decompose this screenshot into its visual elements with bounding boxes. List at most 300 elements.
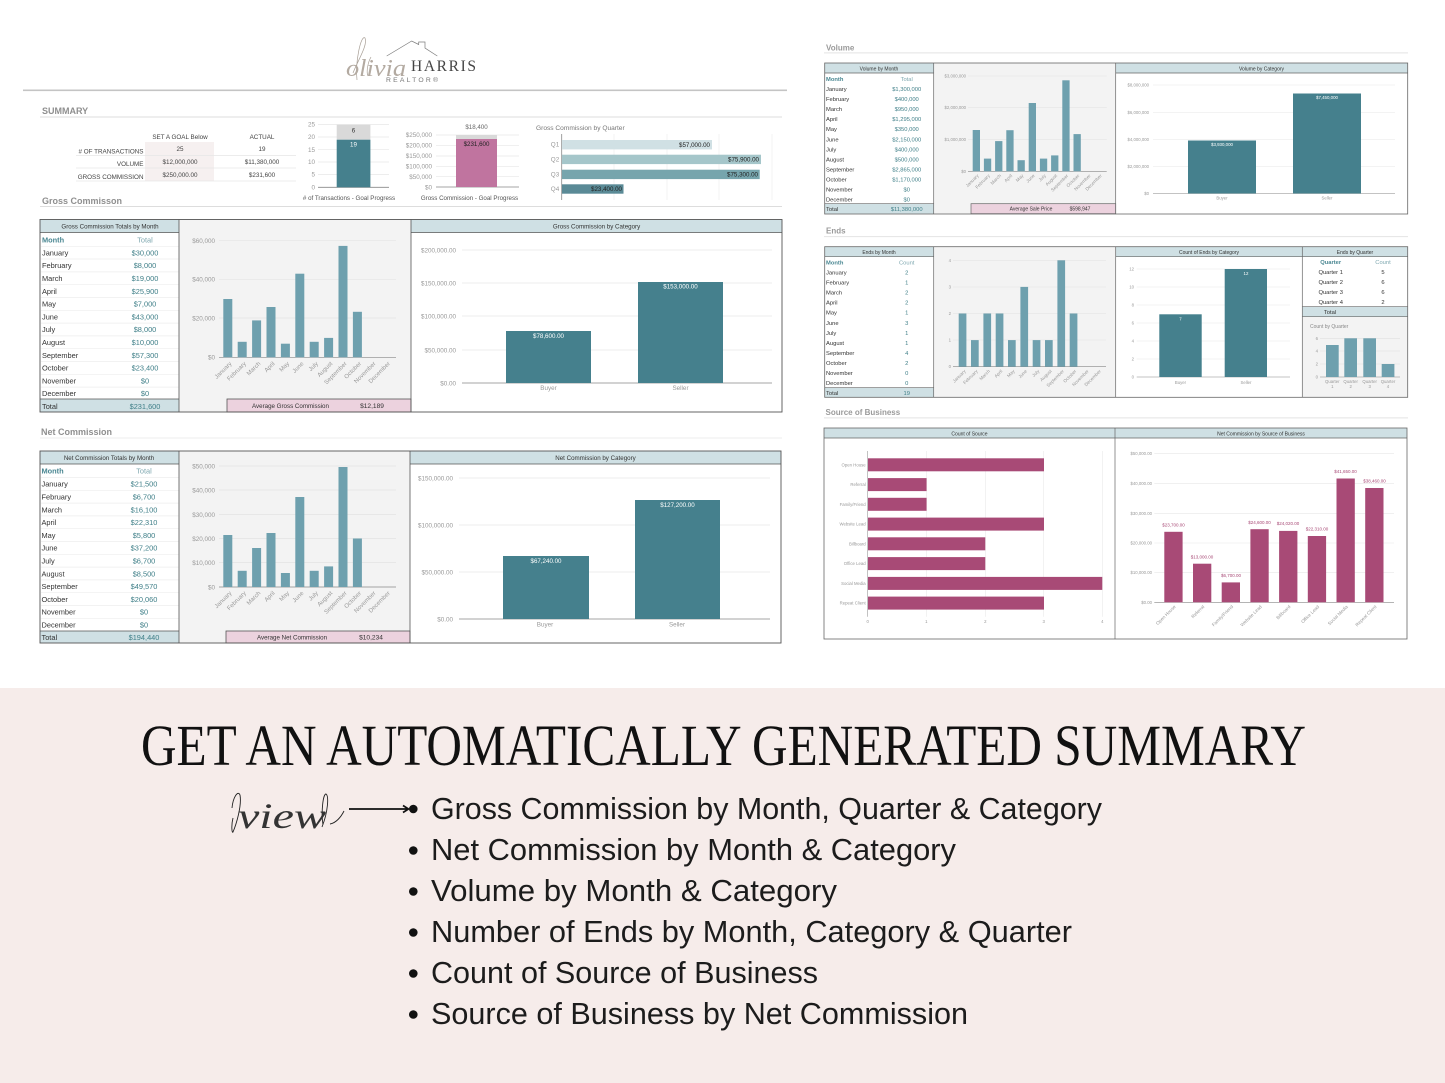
chart: ends by month: 1 (949, 338, 952, 342)
table: gross commission totals by month: $43,000 (132, 312, 158, 321)
chart: net commission by category: $150,000.00 (418, 475, 453, 482)
chart: net commission by source of business: $22,310.00 (1306, 526, 1329, 532)
table: ends by month: July (826, 331, 836, 337)
table: gross commission totals by month: Total (137, 236, 153, 245)
callout: average net commission: $10,234 (359, 634, 383, 642)
chart: ends by month: November (1071, 368, 1090, 387)
chart: transactions goal progress: 10 (308, 159, 315, 166)
heading: source of business: Source of Business (826, 408, 901, 417)
logo: Olivia Harris Realtor: HARRIS (411, 58, 476, 75)
table: net commission totals by month: $20,060 (131, 595, 157, 604)
callout: average net commission: Average Net Commission (257, 634, 328, 642)
chart: gross commission by category: $50,000.00 (424, 347, 456, 354)
chart: ends by month: April (993, 369, 1003, 379)
chart: count of source: Open House (842, 462, 866, 467)
chart background (934, 247, 1116, 397)
bullet list: Gross Commission by Month, Quarter & Category (431, 791, 1102, 826)
chart: net commission by month: $20,000 (192, 536, 215, 543)
chart: transactions goal progress: 25 (308, 122, 315, 128)
table: gross commission totals by month: $19,000 (132, 274, 158, 283)
chart: ends by month: August (1039, 368, 1053, 382)
chart: count of ends by category: 4 (1132, 338, 1135, 344)
table: volume by month: Month (826, 77, 844, 83)
table: ends by month: February (826, 281, 849, 287)
bullet list: Count of Source of Business (431, 955, 818, 990)
table: net commission totals by month: July (42, 556, 55, 566)
chart: volume by month: April (1003, 173, 1013, 183)
chart: count of source: 1 (925, 619, 928, 624)
table: net commission totals by month: April (42, 518, 57, 527)
table: ends by month: Count (899, 260, 915, 266)
chart: volume by month: March (990, 173, 1002, 186)
table: net commission totals by month: $6,700 (133, 556, 155, 566)
chart: transactions goal progress: 15 (308, 147, 315, 154)
chart: count by quarter: Quarter (1343, 379, 1359, 384)
table: gross commission totals by month: Gross Commission Totals by Month (61, 224, 159, 230)
chart: count by quarter: Quarter (1381, 379, 1396, 384)
chart: net commission by month: $50,000 (192, 463, 215, 470)
chart: net commission by month: February (227, 591, 248, 612)
bullet list: Number of Ends by Month, Category & Quarter (431, 914, 1072, 949)
chart: net commission by source of business: $10,000.00 (1130, 570, 1153, 575)
chart: gross commission by month: February (227, 361, 248, 382)
chart: net commission by month: November (354, 591, 377, 614)
table: ends by month: Month (826, 260, 844, 266)
chart: volume by month: $2,000,000 (944, 105, 967, 110)
table: gross commission totals by month: May (42, 300, 56, 309)
chart: volume by month: July (1038, 173, 1047, 182)
chart: net commission by month: September (324, 591, 349, 616)
chart: count of ends by category (1116, 247, 1302, 385)
table: ends by quarter: Quarter 4 (1318, 300, 1344, 306)
callout: average gross commission (227, 399, 411, 412)
chart: volume by category: Buyer (1216, 196, 1228, 200)
chart: gross commission by month: May (279, 361, 291, 373)
chart: gross commission goal progress: $18,400 (465, 124, 488, 131)
chart: volume by month: June (1025, 173, 1036, 184)
table: gross commission totals by month (40, 220, 179, 412)
table: volume by month: July (826, 147, 836, 153)
table: net commission totals by month: $0 (140, 620, 148, 630)
chart: count of source: Repeat Client (840, 601, 866, 606)
table: gross commission totals by month: $25,900 (132, 287, 158, 296)
table: gross commission totals by month: August (42, 338, 65, 347)
chart: count of source: Billboard (849, 541, 866, 546)
chart: ends by month: December (1083, 368, 1102, 387)
table: volume by month: $1,170,000 (892, 177, 921, 183)
bullet list: Volume by Month & Category (431, 873, 837, 908)
table: ends by month: September (826, 351, 854, 357)
chart: net commission by month: March (246, 591, 262, 607)
table: ends by quarter: 5 (1381, 270, 1385, 276)
chart: count of source: Family/Friend (840, 502, 866, 507)
table: volume by month: November (826, 187, 853, 193)
chart: volume by month: $0 (961, 169, 967, 174)
chart: net commission by source of business: Open House (1155, 604, 1177, 626)
chart: ends by month: January (952, 368, 967, 384)
chart: count of source: 3 (1043, 619, 1046, 624)
table: ends by month: 0 (905, 371, 908, 377)
table: gross commission totals by month: $10,000 (132, 338, 158, 347)
chart: net commission by source of business (1115, 428, 1407, 628)
table: net commission totals by month: Total (136, 467, 152, 476)
chart: count by quarter: 4 (1387, 384, 1390, 389)
summary goal table (76, 134, 296, 181)
chart: count of ends by category: 10 (1129, 284, 1135, 290)
chart: count by quarter: Count by Quarter (1310, 324, 1349, 330)
table: net commission totals by month: August (42, 569, 65, 578)
chart: volume by category: $0 (1144, 191, 1150, 196)
chart: gross commission goal progress: $250,000 (406, 132, 432, 139)
table: ends by month: 2 (905, 271, 908, 277)
callout: average net commission (226, 631, 410, 643)
chart: count of ends by category: 8 (1132, 302, 1135, 308)
table: volume by month: Volume by Month (860, 66, 899, 72)
chart: transactions goal progress (303, 122, 395, 202)
chart: gross commission by month: September (324, 361, 349, 386)
chart: net commission by source of business: Billboard (1275, 604, 1292, 620)
chart: gross commission by month: $20,000 (192, 315, 215, 322)
table: volume by month: $400,000 (895, 97, 919, 103)
chart: volume by month (944, 74, 1107, 193)
table: ends by quarter: 6 (1381, 280, 1385, 286)
chart: count of source: Referral (850, 482, 866, 487)
table: ends by quarter: Quarter (1320, 260, 1342, 266)
chart: count of ends by category: 6 (1132, 320, 1135, 326)
chart: count of ends by category: 7 (1179, 316, 1182, 322)
table: net commission totals by month: $5,800 (133, 531, 155, 540)
chart: net commission by month: $10,000 (192, 560, 215, 567)
heading: summary: SUMMARY (42, 106, 88, 116)
table: ends by month: June (826, 321, 839, 327)
table: ends by month: 0 (905, 381, 908, 387)
table: gross commission totals by month: $23,400 (132, 364, 158, 373)
callout: average gross commission: $12,189 (360, 403, 384, 410)
chart: gross commission by quarter: Q3 (551, 172, 560, 178)
chart: volume by month: August (1044, 173, 1059, 187)
table: ends by quarter (1302, 247, 1408, 317)
summary goal table: VOLUME (117, 161, 144, 168)
table: net commission totals by month: $6,700 (133, 492, 155, 502)
table: ends by quarter: Count (1375, 260, 1391, 266)
chart: count by quarter: 2 (1316, 362, 1319, 366)
chart: count by quarter: 2 (1350, 384, 1353, 389)
table: ends by month: October (826, 361, 847, 367)
table: gross commission totals by month: February (42, 261, 72, 270)
chart: net commission by category: Net Commission by Category (555, 455, 637, 462)
chart: gross commission by quarter: Q4 (551, 186, 560, 193)
chart: count of source: Count of Source (951, 432, 988, 438)
chart: count by quarter: 0 (1316, 374, 1319, 380)
table: volume by month: $950,000 (895, 107, 919, 113)
chart: net commission by source of business: Family/Friend (1211, 604, 1234, 627)
table: volume by month: $1,300,000 (892, 87, 921, 93)
table: ends by quarter: Quarter 1 (1318, 270, 1343, 276)
chart: gross commission by category (411, 220, 782, 392)
chart: gross commission by month: June (292, 361, 306, 375)
chart: gross commission by month (192, 238, 396, 386)
table: volume by month: $2,865,000 (892, 167, 921, 173)
chart: net commission by month (192, 463, 396, 616)
chart: gross commission by month: April (264, 361, 277, 374)
chart background (179, 220, 411, 412)
table: ends by month: 1 (905, 341, 908, 347)
chart: net commission by source of business: Referral (1190, 604, 1205, 619)
table: volume by month: October (826, 177, 847, 183)
chart: net commission by month: $0 (208, 584, 215, 591)
table: net commission totals by month (40, 451, 179, 643)
chart: ends by month: September (1046, 368, 1065, 388)
table: volume by month: $350,000 (895, 127, 919, 133)
chart: ends by month: March (978, 368, 991, 381)
chart: ends by month: 2 (949, 311, 952, 316)
table: volume by month: December (826, 198, 853, 204)
table: volume by month: $0 (903, 187, 910, 193)
chart: net commission by source of business: $0.00 (1141, 600, 1153, 605)
chart: gross commission goal progress: $200,000 (406, 142, 432, 150)
table: net commission totals by month: March (42, 505, 62, 514)
chart: count of ends by category: Buyer (1175, 380, 1187, 385)
table: ends by month: 2 (905, 291, 908, 297)
chart: count by quarter: 6 (1316, 336, 1319, 341)
table: net commission totals by month: $22,310 (131, 518, 157, 527)
chart: net commission by source of business: Repeat Client (1354, 604, 1378, 627)
script word: view: view (238, 796, 326, 836)
chart: count by quarter: 4 (1316, 348, 1319, 354)
table: gross commission totals by month: $8,000 (134, 325, 156, 334)
chart: gross commission by category: $100,000.00 (421, 313, 456, 320)
table: gross commission totals by month: March (42, 274, 63, 283)
chart: net commission by category (410, 451, 781, 628)
chart: net commission by month: $40,000 (192, 487, 215, 494)
chart: count of source: 0 (867, 619, 870, 624)
chart: net commission by month: May (279, 591, 291, 603)
chart: volume by category: $7,450,000 (1316, 95, 1339, 100)
table: ends by month: May (826, 311, 837, 317)
chart: volume by category: $6,000,000 (1127, 110, 1150, 115)
chart: count of ends by category: 12 (1129, 266, 1135, 272)
table: ends by month: Total (826, 391, 838, 397)
table: net commission totals by month: October (42, 595, 68, 604)
table: gross commission totals by month: September (42, 351, 79, 360)
chart: volume by month: December (1084, 173, 1103, 192)
chart: gross commission goal progress: $0 (425, 184, 432, 192)
chart: count by quarter: 1 (1331, 384, 1334, 389)
table: net commission totals by month: Month (42, 467, 64, 476)
chart: volume by month: November (1073, 173, 1092, 192)
chart: gross commission by month: $0 (208, 355, 215, 362)
chart: net commission by category: $50,000.00 (421, 569, 453, 576)
table: volume by month: $500,000 (895, 157, 919, 163)
chart: gross commission by month: January (214, 361, 233, 381)
table: net commission totals by month: September (42, 582, 78, 591)
table: volume by month: January (826, 87, 847, 93)
callout: average sale price: Average Sale Price (1010, 207, 1053, 213)
chart: gross commission goal progress (406, 124, 519, 202)
chart background (934, 63, 1116, 214)
chart: gross commission by category: $0.00 (440, 380, 456, 387)
table: net commission totals by month: $0 (140, 608, 148, 617)
table: volume by month: September (826, 167, 854, 173)
summary goal table: GROSS COMMISSION (78, 174, 144, 181)
table: ends by quarter: Total (1324, 310, 1336, 316)
chart: count by quarter: Quarter (1362, 379, 1378, 384)
chart: gross commission goal progress: Gross Commission - Goal Progress (421, 195, 518, 202)
chart: ends by month: 3 (949, 284, 952, 290)
chart: gross commission by quarter (536, 125, 772, 200)
chart: net commission by month: October (344, 591, 363, 610)
heading: net commission: Net Commission (41, 427, 112, 437)
chart: gross commission by quarter: Q1 (551, 142, 560, 148)
table: net commission totals by month: Total (42, 633, 57, 642)
chart: net commission by source of business: Website Lead (1239, 604, 1263, 628)
chart: volume by month: $3,000,000 (944, 74, 967, 78)
table: gross commission totals by month: December (42, 389, 77, 398)
chart: ends by month: 0 (949, 364, 952, 369)
chart: gross commission by category: Buyer (540, 385, 557, 392)
chart: gross commission by month: October (344, 361, 363, 381)
heading: ends: Ends (826, 226, 846, 236)
chart: gross commission by category: Seller (672, 385, 689, 392)
table: gross commission totals by month: January (42, 248, 69, 257)
panel: net commission (40, 451, 781, 643)
bullet list: Net Commission by Month & Category (431, 832, 956, 867)
chart: net commission by source of business: $30,000.00 (1130, 511, 1153, 516)
table: ends by month: March (826, 291, 842, 297)
table: volume by month: June (826, 137, 839, 143)
chart: gross commission goal progress: $100,000 (406, 164, 432, 170)
chart: count by quarter (1302, 317, 1408, 397)
chart: count of source (824, 428, 1115, 624)
chart: net commission by source of business: Social Media (1327, 604, 1349, 626)
table: gross commission totals by month: October (42, 364, 69, 373)
chart: net commission by month: $30,000 (192, 512, 215, 519)
chart: net commission by source of business: $24,020.00 (1277, 521, 1300, 526)
chart: count of ends by category: Seller (1240, 380, 1252, 385)
summary goal table: # OF TRANSACTIONS (79, 148, 144, 156)
panel: volume (825, 63, 1408, 214)
table: ends by quarter: 6 (1381, 290, 1385, 296)
chart: net commission by source of business: $41,650.00 (1334, 469, 1357, 474)
table: ends by month: January (826, 271, 847, 277)
table: volume by month: February (826, 97, 849, 103)
chart: net commission by category: Seller (669, 622, 685, 628)
chart: net commission by source of business: $6,700.00 (1221, 573, 1242, 578)
table: ends by month: 1 (905, 331, 908, 337)
chart: volume by category: Seller (1322, 196, 1333, 200)
table: ends by quarter: Quarter 2 (1318, 280, 1343, 286)
callout: average sale price: $598,947 (1070, 207, 1091, 213)
logo: Olivia Harris Realtor: olivia (346, 56, 406, 82)
chart: gross commission by quarter: Gross Commission by Quarter (536, 125, 625, 132)
table: volume by month: August (826, 157, 844, 163)
chart: transactions goal progress: 20 (308, 134, 315, 141)
table: volume by month: April (826, 117, 838, 123)
panel: ends (825, 247, 1408, 397)
chart: count of source: Office Lead (844, 561, 866, 566)
callout: average gross commission: Average Gross Commission (252, 403, 330, 410)
summary goal table: ACTUAL (250, 134, 275, 141)
table: net commission totals by month: January (42, 480, 68, 489)
chart: gross commission by category: $200,000.00 (421, 247, 456, 254)
chart: net commission by month: December (368, 591, 392, 614)
table: gross commission totals by month: $0 (141, 376, 149, 385)
table: volume by month: Total (826, 207, 838, 213)
summary goal table: $12,000,000 (162, 159, 198, 166)
chart: volume by month: January (965, 173, 980, 188)
chart: net commission by month: June (292, 590, 306, 604)
chart: ends by month: July (1031, 368, 1041, 378)
logo: Olivia Harris Realtor: REALTOR® (386, 76, 438, 84)
chart: count of source: Website Lead (839, 522, 866, 527)
chart: count by quarter: 3 (1369, 384, 1372, 389)
chart: gross commission by month: $40,000 (192, 277, 215, 284)
heading: gross commission: Gross Commisson (42, 196, 122, 206)
table: ends by month: 2 (905, 301, 908, 307)
table: volume by month: $2,150,000 (892, 137, 921, 143)
chart: count of ends by category: Count of Ends by Category (1179, 250, 1240, 256)
chart: count of source: 4 (1101, 619, 1104, 624)
chart: gross commission by category: $78,600.00 (533, 333, 565, 340)
chart: volume by category (1116, 63, 1408, 200)
chart: volume by month: $1,000,000 (944, 137, 967, 142)
chart: volume by category: $3,930,000 (1211, 142, 1234, 147)
chart: net commission by source of business: $13,000.00 (1191, 554, 1214, 560)
table: ends by month (825, 247, 934, 397)
chart: gross commission by quarter: $23,400.00 (591, 186, 623, 193)
panel: source of business (824, 428, 1407, 639)
chart: count by quarter: Quarter (1325, 379, 1340, 384)
chart: net commission by category: $67,240.00 (531, 558, 562, 565)
table: volume by month (825, 63, 934, 214)
callout: average sale price (971, 204, 1116, 214)
table: net commission totals by month: February (42, 492, 71, 502)
chart: count of ends by category: 2 (1132, 356, 1135, 362)
heading: volume: Volume (826, 44, 855, 52)
summary goal table: SET A GOAL Below (152, 134, 208, 141)
table: ends by month: April (826, 301, 838, 307)
table: ends by month: 4 (905, 351, 909, 357)
chart: ends by month: 4 (949, 258, 952, 263)
chart: volume by category: $2,000,000 (1127, 164, 1150, 169)
table: ends by month: 19 (903, 391, 910, 397)
chart: volume by month: May (1015, 173, 1025, 183)
chart: net commission by source of business: $38,460.00 (1363, 478, 1386, 484)
table: volume by month: $1,295,000 (892, 117, 921, 123)
summary goal table: 25 (176, 146, 184, 153)
chart: transactions goal progress: 0 (311, 184, 315, 192)
table: gross commission totals by month: $30,000 (132, 248, 158, 257)
chart: volume by category: Volume by Category (1239, 66, 1285, 72)
table: ends by quarter: 2 (1381, 300, 1385, 306)
chart: net commission by source of business: $40,000.00 (1130, 481, 1153, 486)
summary goal table: 19 (258, 146, 266, 153)
chart: gross commission goal progress: $50,000 (409, 174, 432, 181)
table: net commission totals by month: June (42, 544, 58, 553)
chart: transactions goal progress: 6 (352, 128, 356, 134)
chart: net commission by month: January (214, 591, 233, 610)
chart: net commission by category: $100,000.00 (418, 522, 453, 529)
chart: ends by month: February (962, 368, 979, 385)
table: net commission totals by month: $16,100 (131, 505, 157, 514)
chart: transactions goal progress: # of Transactions - Goal Progress (303, 195, 395, 202)
chart: volume by month: September (1050, 173, 1070, 193)
table: gross commission totals by month: July (42, 325, 55, 334)
table: ends by quarter: Ends by Quarter (1337, 250, 1374, 256)
table: gross commission totals by month: June (42, 312, 58, 321)
table: ends by month: Ends by Month (862, 250, 896, 256)
summary goal table: $231,600 (249, 172, 276, 179)
